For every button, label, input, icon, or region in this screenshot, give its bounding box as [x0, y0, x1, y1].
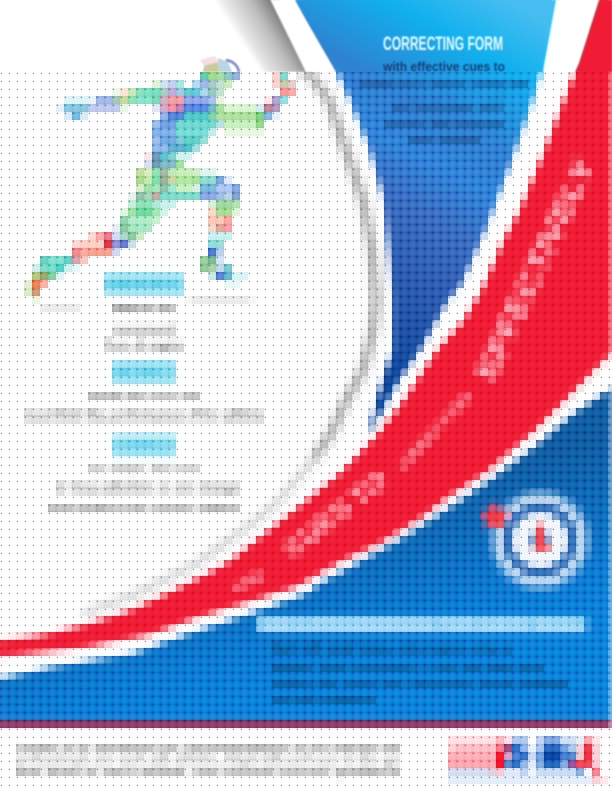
section one heading: [104, 272, 184, 296]
runner figure: [24, 72, 304, 304]
blue lower field: [0, 387, 612, 720]
section one body: movement: [113, 321, 176, 336]
lower body text: athletes show consistency. Cues and drills must: [270, 661, 544, 675]
panel heading text lines: and technique with: [390, 98, 504, 113]
column text: [24, 272, 264, 515]
lower body text: reinforce the correct form, and practice should challenge: [270, 677, 568, 691]
runner helmet: [200, 56, 239, 72]
panel heading text lines: provide cues to improve running form: [357, 76, 529, 91]
main title: CORRECTING FORM: [383, 34, 503, 55]
lower body text: and build confidence: [270, 693, 375, 707]
blue panel top: [295, 0, 556, 72]
section three body: and reinforce the correct pattern: [48, 503, 240, 515]
grey circle shadow lower: [83, 460, 313, 613]
section two heading: DETECT: [113, 364, 175, 380]
grey circle shadow upper: [270, 0, 376, 460]
small swoosh text: USE: [231, 568, 266, 595]
section one body: Watch the: [113, 303, 175, 315]
curled shadow wedge: [218, 0, 306, 72]
footer text: [16, 742, 400, 778]
lower body text: Start with small steps, and progress only as: [270, 640, 512, 657]
red star: [479, 501, 511, 530]
swoosh lettering: [231, 154, 601, 595]
lower body text: [270, 640, 568, 707]
section two body: most limit the performance of the athlete: [24, 407, 264, 423]
footer text: and level of each athlete, and consult current guidance: [16, 766, 400, 778]
footer text: professionals who work with athletes. Adapt drills and cues for the age: [16, 754, 400, 766]
footer logo: [448, 736, 608, 784]
blue top panel: [295, 0, 556, 432]
lower heading: USE A PROGRESSION FOR EVERY SKILL: [260, 617, 582, 632]
section three body: to focus attention on one change: [56, 479, 240, 495]
section two body: [24, 391, 264, 423]
subtitle first line: with effective cues to: [382, 60, 505, 74]
section three body: Use simple, clear cues: [88, 464, 200, 476]
section three heading: CORRECT: [113, 438, 175, 454]
section one heading: OBSERVE: [105, 276, 183, 293]
swoosh word cues: CUES TO: [279, 466, 392, 563]
red corner: [575, 0, 612, 72]
section two body: Identify the errors that: [88, 391, 201, 403]
section two heading: [112, 360, 176, 384]
large swoosh word: EFFECTIVELY: [470, 154, 601, 385]
section one body: from all angles: [105, 337, 183, 352]
unpixelated top strip: [200, 0, 612, 72]
section one body: [105, 303, 183, 352]
section three heading: [112, 434, 176, 458]
panel heading text lines: practice and correction: [385, 116, 505, 131]
thin swoosh text: CORRECT FORM: [396, 391, 473, 472]
panel heading text lines: each session: [408, 132, 480, 147]
target icon: [479, 490, 590, 590]
maroon footer rule: [0, 720, 612, 728]
panel heading text lines: [357, 76, 529, 147]
runner ground shadow: [40, 296, 252, 310]
section three body: [48, 464, 240, 515]
footer text: Content is for educational use. Recommendations are for coaches and: [16, 742, 400, 754]
